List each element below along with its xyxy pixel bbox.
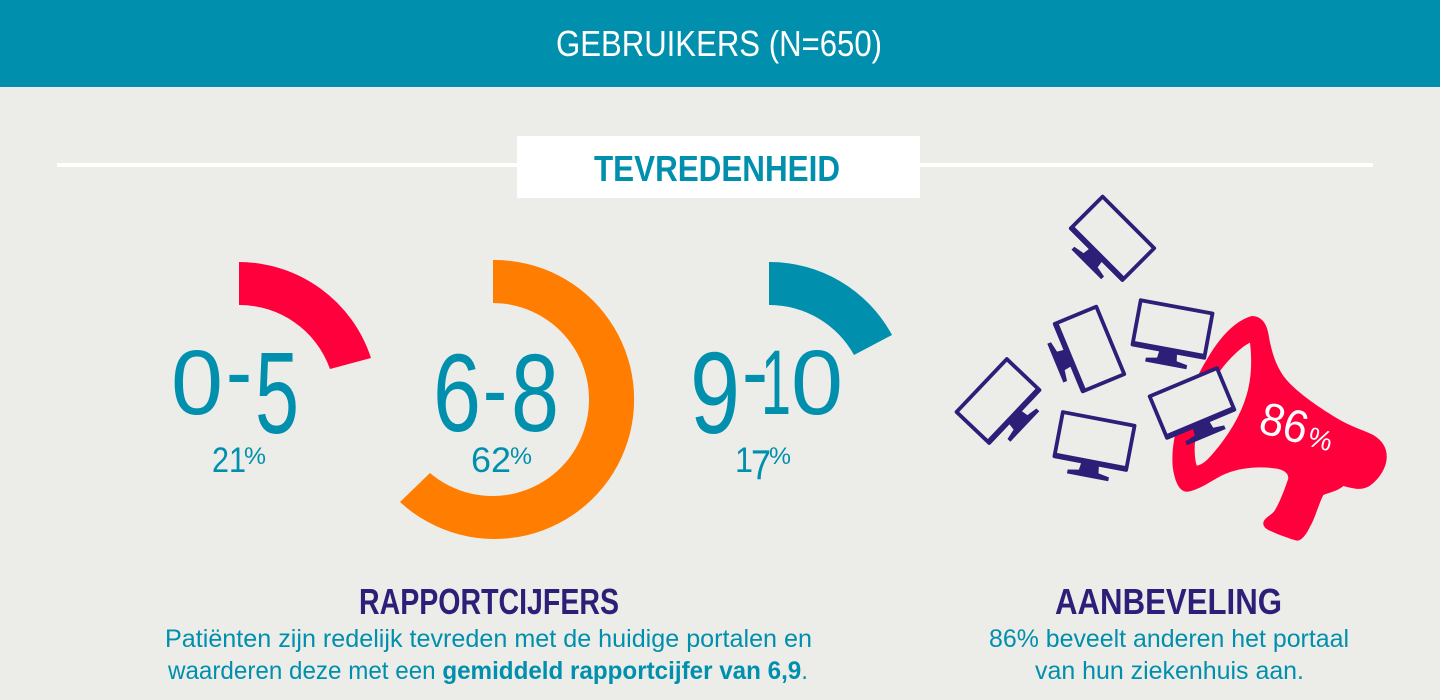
label: 0-5 21%: 0 [171,332,223,434]
body text: Patiënten zijn redelijk tevreden met de huidige portalen en [165,625,812,653]
icon: megaphone [1172,316,1387,541]
label: 0-5 21% [171,321,299,480]
icon: monitor left [956,359,1050,453]
label: 6-8 62%: - [483,339,507,441]
text block: aanbeveling [989,581,1349,685]
label: 6-8 62% [433,332,559,480]
label: 6-8 62%: 62 [471,441,511,480]
heading: rapportcijfers: RAPPORTCIJFERS [359,581,619,622]
label: 0-5 21%: % [244,443,266,470]
text block: rapportcijfers [165,581,812,685]
arc: 6-8 62% [400,260,634,539]
body text [989,625,1349,685]
icon: monitor middle [1041,306,1124,397]
illustration: megaphone with monitors [956,196,1387,541]
section heading: tevredenheid: TEVREDENHEID [594,148,840,189]
heading: aanbeveling: AANBEVELING [1055,581,1282,622]
label: 6-8 62%: 6 [433,332,481,455]
arc: 0-5 21% [239,262,371,369]
body text: 86% beveelt anderen het portaal [989,625,1349,653]
body text: van hun ziekenhuis aan. [1035,657,1304,685]
megaphone label: 86%: 86% [1254,391,1340,461]
body text [165,625,812,685]
label: 0-5 21%: - [226,321,252,423]
icon: monitor bottom [1051,412,1135,484]
panel: rapportcijfers donuts [171,260,892,539]
label: 9-10 17%: 1 [761,332,791,434]
arc: 9-10 17% [769,262,892,355]
label: 0-5 21%: 5 [255,328,299,458]
label: 9-10 17%: 9 [690,328,740,458]
icon: monitor top [1060,196,1155,291]
label: 0-5 21%: 21 [212,441,246,480]
title: GEBRUIKERS (N=650) [556,23,882,64]
header band [0,0,1440,87]
icon: monitor in front of megaphone [1149,368,1240,451]
section heading: tevredenheid [517,136,920,198]
label: 9-10 17%: % [769,443,791,470]
icon: monitor right upper [1129,300,1213,372]
label: 6-8 62%: 8 [511,332,559,455]
label: 9-10 17%: 0 [791,332,843,434]
label: 9-10 17%: 1 [735,441,753,480]
label: 9-10 17%: 7 [751,441,771,488]
label: 6-8 62%: % [510,443,532,470]
label: 9-10 17% [690,321,843,488]
body text: waarderen deze met een gemiddeld rapportcijfer van 6,9. [167,657,808,685]
label: 9-10 17%: - [742,321,768,423]
